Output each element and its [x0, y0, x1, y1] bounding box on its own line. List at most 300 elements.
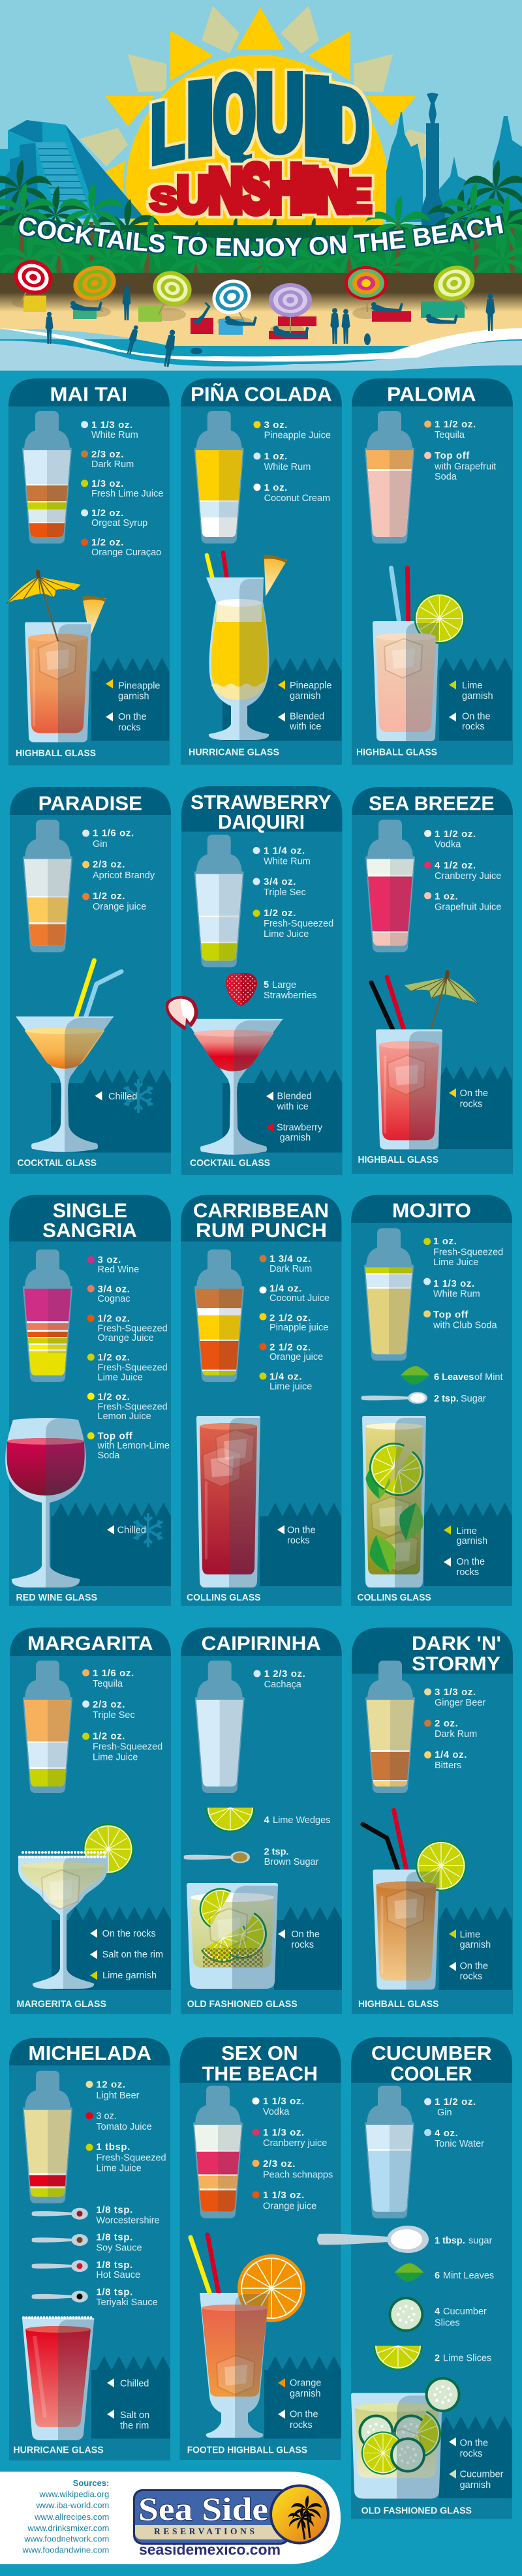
notes: Piña Colada: with ice: [289, 722, 321, 732]
notes: Cucumber Cooler: [449, 2437, 504, 2491]
sun rays: [80, 6, 441, 197]
panel: Cucumber Cooler: [317, 2037, 512, 2519]
panel: Piña Colada: [181, 378, 342, 765]
ingredient list: Dark 'n' Stormy: Ginger Beer: [435, 1698, 485, 1708]
ingredient: sugar: [435, 2236, 492, 2246]
ingredient list: Margarita: 1/2 oz.: [93, 1731, 125, 1742]
ingredient list: Paradise: Orange juice: [93, 902, 146, 912]
notes: Michelada: the rim: [120, 2421, 149, 2431]
ingredient list: Carribbean Rum Punch: Lime juice: [269, 1382, 312, 1392]
beach towels: [23, 296, 465, 339]
ingredient list: Mojito: Top off: [433, 1310, 468, 1321]
shaker: Caipirinha: [194, 1661, 246, 1793]
notes: Sea Breeze: [449, 1088, 488, 1109]
notes: Dark 'n' Stormy: [449, 1929, 491, 1982]
notes: Dark 'n' Stormy: On the: [460, 1961, 488, 1972]
notes: Paradise: Chilled: [108, 1092, 137, 1102]
heading: Mai Tai: [8, 378, 170, 406]
notes: Paradise: [95, 1079, 153, 1113]
ingredient list: Sex on the Beach: 1 1/3 oz.: [263, 2096, 305, 2107]
notes: Margarita: On the rocks: [102, 1929, 156, 1939]
ingredient list: Mojito: [423, 1236, 503, 1331]
ingredient list: Carribbean Rum Punch: 2 1/2 oz.: [269, 1342, 311, 1353]
shaker: Mojito: [363, 1228, 415, 1360]
glass label: Michelada: HURRICANE GLASS: [13, 2444, 104, 2455]
heading: Cucumber Cooler: COOLER: [390, 2062, 472, 2085]
sauces with spoons: Michelada: 1/8 tsp.: [96, 2205, 133, 2216]
ingredient list: Carribbean Rum Punch: Pinapple juice: [269, 1323, 328, 1333]
ingredient list: Carribbean Rum Punch: 1/4 oz.: [269, 1283, 302, 1295]
ingredient list: Cucumber Cooler: 4 oz.: [435, 2128, 458, 2139]
ingredient list: Single Sangria: Soda: [98, 1450, 120, 1461]
heading: Dark 'n' Stormy: STORMY: [412, 1652, 500, 1675]
notes: Strawberry Daiquiri: Blended: [277, 1092, 312, 1102]
shaker: Cucumber Cooler: [363, 2086, 416, 2218]
notes: Strawberry Daiquiri: Strawberry: [277, 1122, 323, 1133]
ingredient list: Sea Breeze: 1 oz.: [435, 891, 458, 902]
glass label: Strawberry Daiquiri: COCKTAIL GLASS: [190, 1158, 270, 1169]
glass label: Mai Tai: HIGHBALL GLASS: [16, 748, 96, 759]
ingredient list: Strawberry Daiquiri: [253, 846, 333, 940]
sauces with spoons: Michelada: Soy Sauce: [96, 2243, 142, 2254]
notes: Michelada: Salt on: [120, 2410, 149, 2421]
ingredient list: Strawberry Daiquiri: 3/4 oz.: [264, 876, 296, 887]
ingredient list: Paradise: 1 1/6 oz.: [93, 828, 134, 839]
heading: Strawberry Daiquiri: STRAWBERRY: [191, 791, 331, 814]
heading: Margarita: MARGARITA: [27, 1632, 153, 1655]
notes: Paloma: garnish: [462, 691, 493, 701]
sun disc: [125, 54, 390, 318]
ingredient list: Single Sangria: 1/2 oz.: [98, 1391, 130, 1402]
ingredient: mint: 6 Leaves: [434, 1372, 474, 1383]
title: Liquid: U: [256, 52, 304, 172]
shoreline and sea: [0, 328, 522, 372]
panel: Strawberry Daiquiri: [166, 786, 342, 1175]
icon: strawberry: [226, 973, 257, 1006]
ingredient list: Sex on the Beach: [252, 2096, 333, 2212]
icon: snowflake: [134, 1513, 162, 1547]
panel: Single Sangria: [5, 1195, 171, 1606]
notes: Strawberry Daiquiri: [266, 1092, 323, 1143]
notes: Margarita: [90, 1929, 163, 1981]
ingredient list: Strawberry Daiquiri: 1 1/4 oz.: [264, 846, 305, 857]
ingredient: strawberries: 5: [264, 980, 269, 990]
beach umbrellas: [9, 254, 480, 333]
sources list: www.foodnetwork.com: [23, 2534, 109, 2544]
notes: Mai Tai: rocks: [118, 723, 141, 733]
heading: Mai Tai: MAI TAI: [50, 383, 127, 406]
glass: Sea Breeze highball with umbrella: [371, 972, 479, 1150]
glass: Strawberry Daiquiri cocktail: [166, 996, 283, 1155]
ingredient list: Mai Tai: White Rum: [91, 430, 138, 440]
Sea Side Reservations logo: seasidemexico.com: [139, 2541, 281, 2558]
ingredient list: Mai Tai: 1 1/3 oz.: [91, 420, 133, 431]
ingredient list: Cucumber Cooler: [424, 2096, 484, 2149]
heading: Cucumber Cooler: CUCUMBER: [371, 2042, 492, 2064]
ingredient list: Mai Tai: [81, 420, 163, 558]
panel: Sea Breeze: [352, 787, 513, 1174]
ingredient list: Single Sangria: Fresh-Squeezed: [98, 1402, 168, 1413]
ingredient list: Strawberry Daiquiri: White Rum: [264, 856, 311, 866]
glass label: Sex on the Beach: FOOTED HIGHBALL GLASS: [187, 2444, 307, 2455]
title: Sunshine: [150, 151, 372, 227]
heading: Single Sangria: SANGRIA: [42, 1219, 137, 1242]
ingredient list: Strawberry Daiquiri: 1/2 oz.: [264, 908, 296, 919]
notes: Dark 'n' Stormy: rocks: [460, 1972, 482, 1982]
ingredient list: Cucumber Cooler: Tonic Water: [435, 2139, 484, 2149]
ingredient list: Margarita: 2/3 oz.: [93, 1699, 125, 1710]
notes: Dark 'n' Stormy: garnish: [460, 1940, 491, 1950]
glass: Mojito collins: [361, 1416, 433, 1587]
ingredient: mint leaves: Mint Leaves: [443, 2271, 494, 2281]
icon: snowflake: [124, 1079, 153, 1113]
ingredient: brown sugar: Brown Sugar: [264, 1857, 319, 1867]
ingredient list: Strawberry Daiquiri: Triple Sec: [264, 887, 306, 898]
glass label: Margarita: MARGERITA GLASS: [17, 1999, 106, 2010]
ingredient: cucumber slices: Cucumber: [443, 2307, 487, 2317]
ingredient list: Piña Colada: Coconut Cream: [264, 493, 330, 504]
ingredient: sugar: Sugar: [461, 1394, 486, 1404]
heading: Paradise: PARADISE: [38, 791, 142, 814]
glass: Margarita with salt rim and lime: [18, 1824, 134, 1989]
glass label: Caipirinha: OLD FASHIONED GLASS: [187, 1999, 298, 2010]
panel: Sex on the Beach: [180, 2037, 341, 2460]
ingredient list: Dark 'n' Stormy: 1/4 oz.: [435, 1749, 467, 1760]
ingredient list: Carribbean Rum Punch: 2 1/2 oz.: [269, 1313, 311, 1324]
heading: Paloma: PALOMA: [387, 383, 476, 406]
ingredient list: Margarita: [82, 1668, 162, 1762]
beach people: [46, 286, 495, 367]
ingredient: mint leaves: 6: [435, 2271, 440, 2281]
glass label: Cucumber Cooler: OLD FASHIONED GLASS: [361, 2506, 472, 2516]
glass: Paradise cocktail: [16, 960, 121, 1152]
ingredient list: Sea Breeze: 4 1/2 oz.: [435, 860, 476, 871]
glass: Caipirinha old fashioned: [187, 1880, 278, 1989]
ingredient list: Margarita: 1 1/6 oz.: [93, 1668, 134, 1679]
notes: Piña Colada: garnish: [290, 691, 321, 701]
pyramid: [0, 120, 145, 219]
notes: Michelada: Chilled: [120, 2379, 149, 2389]
heading: Cucumber Cooler: [351, 2037, 512, 2085]
panel: Caipirinha: [181, 1627, 342, 2014]
panel: Mai Tai: [7, 378, 170, 765]
tagline: COCKTAILS TO ENJOY ON THE BEACH: [18, 214, 504, 258]
ingredient: lime slices: 2: [435, 2354, 440, 2364]
ingredient list: Strawberry Daiquiri: Fresh-Squeezed: [264, 919, 333, 929]
ingredient list: Michelada: Fresh-Squeezed: [96, 2153, 166, 2164]
title: Sunshine: I: [298, 152, 323, 226]
shaker: Sea Breeze: [364, 820, 416, 952]
title: Liquid: [151, 51, 369, 185]
heading: Sea Breeze: [352, 787, 513, 815]
sources list: Sources:: [73, 2478, 109, 2488]
ingredient list: Michelada: 12 oz.: [96, 2079, 126, 2091]
ingredient list: Sea Breeze: [424, 829, 501, 912]
sauces with spoons: Michelada: Hot Sauce: [96, 2270, 140, 2280]
ingredient list: Mojito: with Club Soda: [433, 1321, 497, 1331]
shaker: Single Sangria: [22, 1250, 74, 1382]
notes: Mojito: On the: [457, 1557, 485, 1567]
ingredient list: Paradise: 2/3 oz.: [93, 859, 125, 870]
glass label: Paloma: HIGHBALL GLASS: [356, 747, 437, 758]
ingredient list: Margarita: Lime Juice: [93, 1752, 138, 1762]
notes: Piña Colada: Blended: [290, 712, 324, 722]
ingredient list: Single Sangria: Lime Juice: [98, 1373, 143, 1383]
icon: cucumber slice: [388, 2297, 423, 2332]
ingredient: lime wedges: Lime Wedges: [273, 1815, 330, 1826]
notes: Piña Colada: Pineapple: [290, 681, 331, 691]
shaker: Paloma: [363, 411, 416, 544]
sauces with spoons: Michelada: Teriyaki Sauce: [96, 2297, 158, 2308]
ingredient list: Paradise: [82, 828, 155, 912]
icon: lime wedge: [206, 1807, 255, 1832]
panel: Paloma: [352, 378, 513, 765]
notes: Mai Tai: Pineapple: [118, 681, 161, 692]
illustrated header scene: [0, 0, 522, 372]
ingredient: sugar: 1 tbsp.: [435, 2236, 465, 2246]
ingredient list: Piña Colada: Pineapple Juice: [264, 431, 331, 441]
ingredient list: Michelada: 1 tbsp.: [96, 2141, 130, 2153]
title: Sunshine: U: [177, 165, 210, 223]
ingredient list: Paradise: Gin: [93, 839, 108, 850]
glass: Dark 'n' Stormy highball with lime: [363, 1810, 467, 1989]
title: Sunshine: S: [241, 151, 271, 227]
heading: Dark 'n' Stormy: [352, 1627, 513, 1675]
ingredient list: Mojito: 1 oz.: [433, 1236, 457, 1247]
panel: Dark 'n' Stormy: [352, 1627, 513, 2014]
ingredient list: Margarita: Tequila: [93, 1679, 123, 1689]
sauces with spoons: Michelada: 1/8 tsp.: [96, 2232, 133, 2243]
heading: Dark 'n' Stormy: DARK 'N': [412, 1632, 501, 1655]
heading: Paloma: [352, 378, 513, 406]
icon: mint leaf: [395, 2263, 423, 2282]
palm grove: [0, 160, 522, 307]
ingredient list: Mai Tai: 1/2 oz.: [91, 537, 124, 548]
heading: Michelada: [9, 2038, 170, 2066]
heading: Sex on the Beach: THE BEACH: [202, 2062, 318, 2085]
ingredient list: Carribbean Rum Punch: [260, 1253, 330, 1392]
ingredient: mint: [434, 1372, 503, 1383]
heading: Single Sangria: SINGLE: [53, 1199, 127, 1221]
notes: Mai Tai: [106, 679, 161, 733]
ingredient list: Carribbean Rum Punch: 1 3/4 oz.: [269, 1253, 311, 1265]
notes: Strawberry Daiquiri: with ice: [277, 1101, 309, 1112]
icon: large spoon of sugar: [317, 2226, 429, 2253]
sauces with spoons: Michelada: [31, 2205, 160, 2308]
glass label: Piña Colada: HURRICANE GLASS: [189, 747, 279, 758]
ingredient: brown sugar: [264, 1847, 319, 1867]
ingredient list: Single Sangria: 1/2 oz.: [98, 1313, 130, 1325]
ingredient: lime slices: Lime Slices: [443, 2354, 491, 2364]
glass: Piña Colada hurricane: [206, 553, 288, 740]
ingredient list: Mojito: 1 1/3 oz.: [433, 1278, 475, 1289]
ingredient list: Cucumber Cooler: 1 1/2 oz.: [435, 2096, 476, 2108]
panel: Paradise: [10, 787, 171, 1174]
notes: Cucumber Cooler: rocks: [460, 2449, 482, 2459]
notes: Mai Tai: On the: [118, 712, 147, 722]
ingredient list: Paloma: Top off: [435, 450, 470, 461]
ingredient list: Single Sangria: Lemon Juice: [98, 1411, 151, 1422]
glass label: Single Sangria: RED WINE GLASS: [16, 1592, 97, 1603]
ingredient list: Michelada: Tomato Juice: [96, 2122, 152, 2132]
notes: Carribbean Rum Punch: On the: [287, 1526, 316, 1536]
shaker: Strawberry Daiquiri: [193, 835, 245, 967]
ingredient list: Carribbean Rum Punch: Coconut Juice: [269, 1293, 330, 1304]
icon: spoon of brown sugar: [184, 1851, 250, 1863]
beach sand: [0, 273, 522, 359]
sauces with spoons: Michelada: Worcestershire: [96, 2216, 160, 2226]
notes: Margarita: Lime garnish: [102, 1970, 157, 1981]
ingredient list: Caipirinha: 1 2/3 oz.: [264, 1668, 305, 1679]
ingredient list: Single Sangria: Orange Juice: [98, 1333, 154, 1343]
ingredient list: Single Sangria: Top off: [98, 1431, 133, 1442]
ingredient list: Sea Breeze: 1 1/2 oz.: [435, 829, 476, 840]
shaker: Michelada: [22, 2071, 74, 2203]
title: Liquid: I: [299, 51, 335, 181]
ingredient list: Single Sangria: 1/2 oz.: [98, 1352, 130, 1363]
heading: Mojito: [351, 1195, 512, 1223]
shaker: Paradise: [22, 820, 74, 952]
notes: Single Sangria: Chilled: [117, 1526, 146, 1536]
notes: Sea Breeze: On the: [460, 1088, 488, 1099]
glass label: Paradise: COCKTAIL GLASS: [17, 1158, 97, 1169]
title: Liquid: D: [328, 66, 369, 185]
ingredient list: Sex on the Beach: Peach schnapps: [263, 2170, 333, 2180]
sources list: www.wikipedia.org: [38, 2489, 109, 2499]
Sea Side Reservations logo: [133, 2485, 330, 2558]
ingredient list: Piña Colada: 1 oz.: [264, 482, 288, 493]
notes: Paloma: Lime: [462, 681, 482, 691]
ingredient: cucumber slices: 4: [435, 2307, 440, 2317]
ingredient list: Single Sangria: 3 oz.: [98, 1254, 121, 1265]
ingredient list: Mai Tai: Dark Rum: [91, 459, 134, 470]
panel: Mojito: [351, 1195, 512, 1606]
glass label: Carribbean Rum Punch: COLLINS GLASS: [187, 1592, 261, 1603]
ingredient: cucumber slices: Slices: [435, 2318, 460, 2328]
notes: Mojito: rocks: [457, 1567, 479, 1578]
icon: mint leaf: [401, 1366, 429, 1385]
ingredient list: Mojito: Fresh-Squeezed: [433, 1248, 503, 1258]
heading: Carribbean Rum Punch: RUM PUNCH: [196, 1219, 327, 1242]
ingredient list: Michelada: [86, 2079, 166, 2174]
Sea Side Reservations logo: RESERVATIONS: [154, 2526, 254, 2536]
ingredient list: Single Sangria: Red Wine: [98, 1265, 139, 1275]
ingredient list: Caipirinha: [253, 1668, 305, 1690]
ingredient list: Dark 'n' Stormy: Bitters: [435, 1760, 461, 1771]
city skyline: [386, 93, 522, 225]
ingredient list: Single Sangria: 3/4 oz.: [98, 1284, 130, 1295]
ingredient list: Carribbean Rum Punch: Dark Rum: [269, 1264, 312, 1274]
glass: Single Sangria red wine: [5, 1418, 86, 1587]
ingredient list: Sex on the Beach: Cranberry juice: [263, 2138, 327, 2149]
ingredient list: Dark 'n' Stormy: [424, 1687, 485, 1771]
ingredient: mint: of Mint: [474, 1372, 503, 1383]
umbrella shadows: [12, 296, 381, 335]
heading: Sea Breeze: SEA BREEZE: [369, 791, 495, 814]
ingredient list: Single Sangria: Fresh-Squeezed: [98, 1362, 168, 1373]
ingredient list: Mai Tai: 2/3 oz.: [91, 449, 124, 460]
ingredient list: Paloma: Soda: [435, 472, 457, 482]
ingredient list: Single Sangria: Fresh-Squeezed: [98, 1324, 168, 1334]
glass: Michelada with salt rim: [22, 2318, 94, 2440]
notes: Sex on the Beach: garnish: [290, 2389, 321, 2399]
glass label: Sea Breeze: HIGHBALL GLASS: [358, 1154, 438, 1165]
glass: Paloma highball with lime: [373, 568, 465, 741]
ingredient list: Paradise: 1/2 oz.: [93, 891, 125, 902]
shaker: Piña Colada: [193, 411, 245, 544]
title: Sunshine: H: [269, 151, 303, 226]
ingredient list: Dark 'n' Stormy: 3 1/3 oz.: [435, 1687, 476, 1698]
notes: Sex on the Beach: [278, 2378, 321, 2430]
ingredient list: Dark 'n' Stormy: Dark Rum: [435, 1729, 477, 1740]
sauces with spoons: Michelada: 1/8 tsp.: [96, 2260, 133, 2271]
heading: Paradise: [10, 787, 171, 815]
heading: Strawberry Daiquiri: DAIQUIRI: [218, 810, 305, 833]
notes: Single Sangria: [107, 1513, 162, 1547]
ingredient list: Mai Tai: Orgeat Syrup: [91, 518, 147, 529]
heading: Caipirinha: [181, 1627, 342, 1656]
title: Sunshine: N: [316, 160, 350, 225]
ingredient list: Caipirinha: Cachaça: [264, 1679, 302, 1690]
panel: Margarita: [10, 1627, 171, 2014]
ingredient list: Michelada: Lime Juice: [96, 2164, 142, 2174]
notes: Dark 'n' Stormy: Lime: [460, 1929, 480, 1940]
ingredient list: Sea Breeze: Vodka: [435, 840, 461, 850]
ingredient list: Piña Colada: White Rum: [264, 462, 311, 472]
notes: Cucumber Cooler: garnish: [460, 2480, 491, 2491]
ingredient list: Cucumber Cooler: Gin: [437, 2108, 452, 2118]
ingredient list: Mai Tai: Fresh Lime Juice: [91, 489, 163, 499]
ingredient: strawberries: [264, 980, 316, 1001]
title: Sunshine: N: [208, 156, 243, 226]
ingredient list: Paloma: with Grapefruit: [434, 462, 496, 472]
ingredient: cucumber slices: [435, 2307, 487, 2328]
sources list: www.allrecipes.com: [34, 2512, 109, 2522]
notes: Margarita: Salt on the rim: [102, 1950, 163, 1960]
notes: Mojito: garnish: [457, 1536, 487, 1546]
notes: Strawberry Daiquiri: garnish: [280, 1133, 311, 1143]
ingredient list: Single Sangria: Cognac: [98, 1294, 130, 1304]
sources list: www.drinksmixer.com: [27, 2523, 109, 2533]
heading: Michelada: MICHELADA: [28, 2042, 151, 2064]
title: Sunshine: E: [346, 170, 372, 222]
sources list: www.iba-world.com: [35, 2500, 109, 2510]
notes: Sea Breeze: rocks: [460, 1099, 482, 1109]
notes: Carribbean Rum Punch: rocks: [287, 1536, 310, 1546]
glass label: Dark 'n' Stormy: HIGHBALL GLASS: [358, 1999, 438, 2010]
ingredient list: Sex on the Beach: Vodka: [263, 2107, 290, 2117]
heading: Margarita: [10, 1627, 171, 1656]
sources list: [22, 2478, 109, 2555]
heading: Piña Colada: PIÑA COLADA: [191, 383, 332, 406]
ingredient list: Mojito: Lime Juice: [433, 1257, 478, 1268]
heading: Carribbean Rum Punch: [181, 1195, 342, 1242]
glass label: Mojito: COLLINS GLASS: [358, 1592, 431, 1603]
notes: Cucumber Cooler: Cucumber: [460, 2470, 504, 2480]
heading: Carribbean Rum Punch: CARRIBBEAN: [193, 1199, 329, 1221]
ingredient list: Margarita: Fresh-Squeezed: [93, 1742, 162, 1753]
notes: Michelada: [107, 2378, 149, 2431]
shaker: Sex on the Beach: [192, 2086, 244, 2218]
notes: Mojito: Lime: [457, 1526, 477, 1537]
title: Sunshine: S: [150, 181, 177, 219]
ingredient: strawberries: Large: [272, 980, 296, 990]
title: Liquid: I: [182, 57, 219, 180]
ingredient: sugar: 2 tsp.: [434, 1394, 459, 1404]
ingredient list: Piña Colada: 1 oz.: [264, 451, 288, 462]
ingredient list: Michelada: 3 oz.: [96, 2111, 117, 2122]
ingredient list: Carribbean Rum Punch: 1/4 oz.: [269, 1372, 302, 1383]
